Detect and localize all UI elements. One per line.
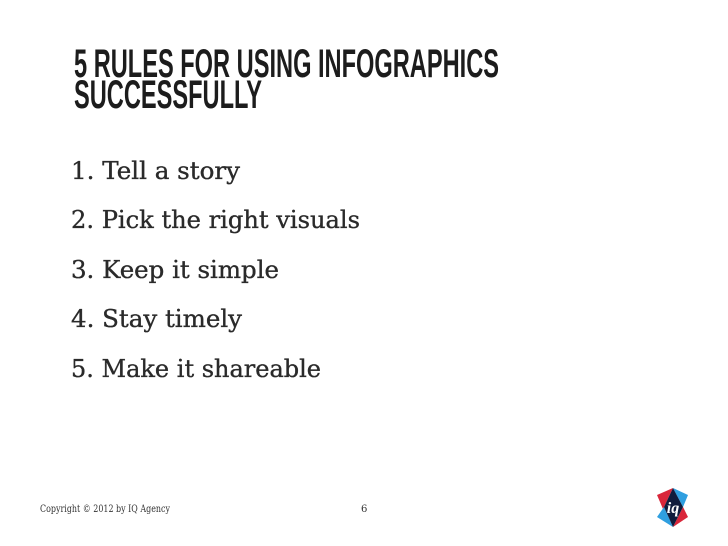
icon: IQ logo: [657, 488, 688, 527]
title: SUCCESSFULLY: [74, 73, 262, 117]
rule 5: 5. Make it shareable: [71, 355, 321, 383]
title: [74, 42, 499, 117]
copyright footer: Copyright © 2012 by IQ Agency: [40, 504, 170, 515]
rule 1: 1. Tell a story: [71, 157, 240, 185]
icon: IQ logo: iq: [667, 500, 679, 517]
page number: 6: [361, 504, 367, 515]
rule 3: 3. Keep it simple: [71, 256, 279, 284]
rule 4: 4. Stay timely: [71, 305, 242, 333]
rule 2: 2. Pick the right visuals: [71, 206, 360, 234]
rules list: [71, 157, 360, 383]
